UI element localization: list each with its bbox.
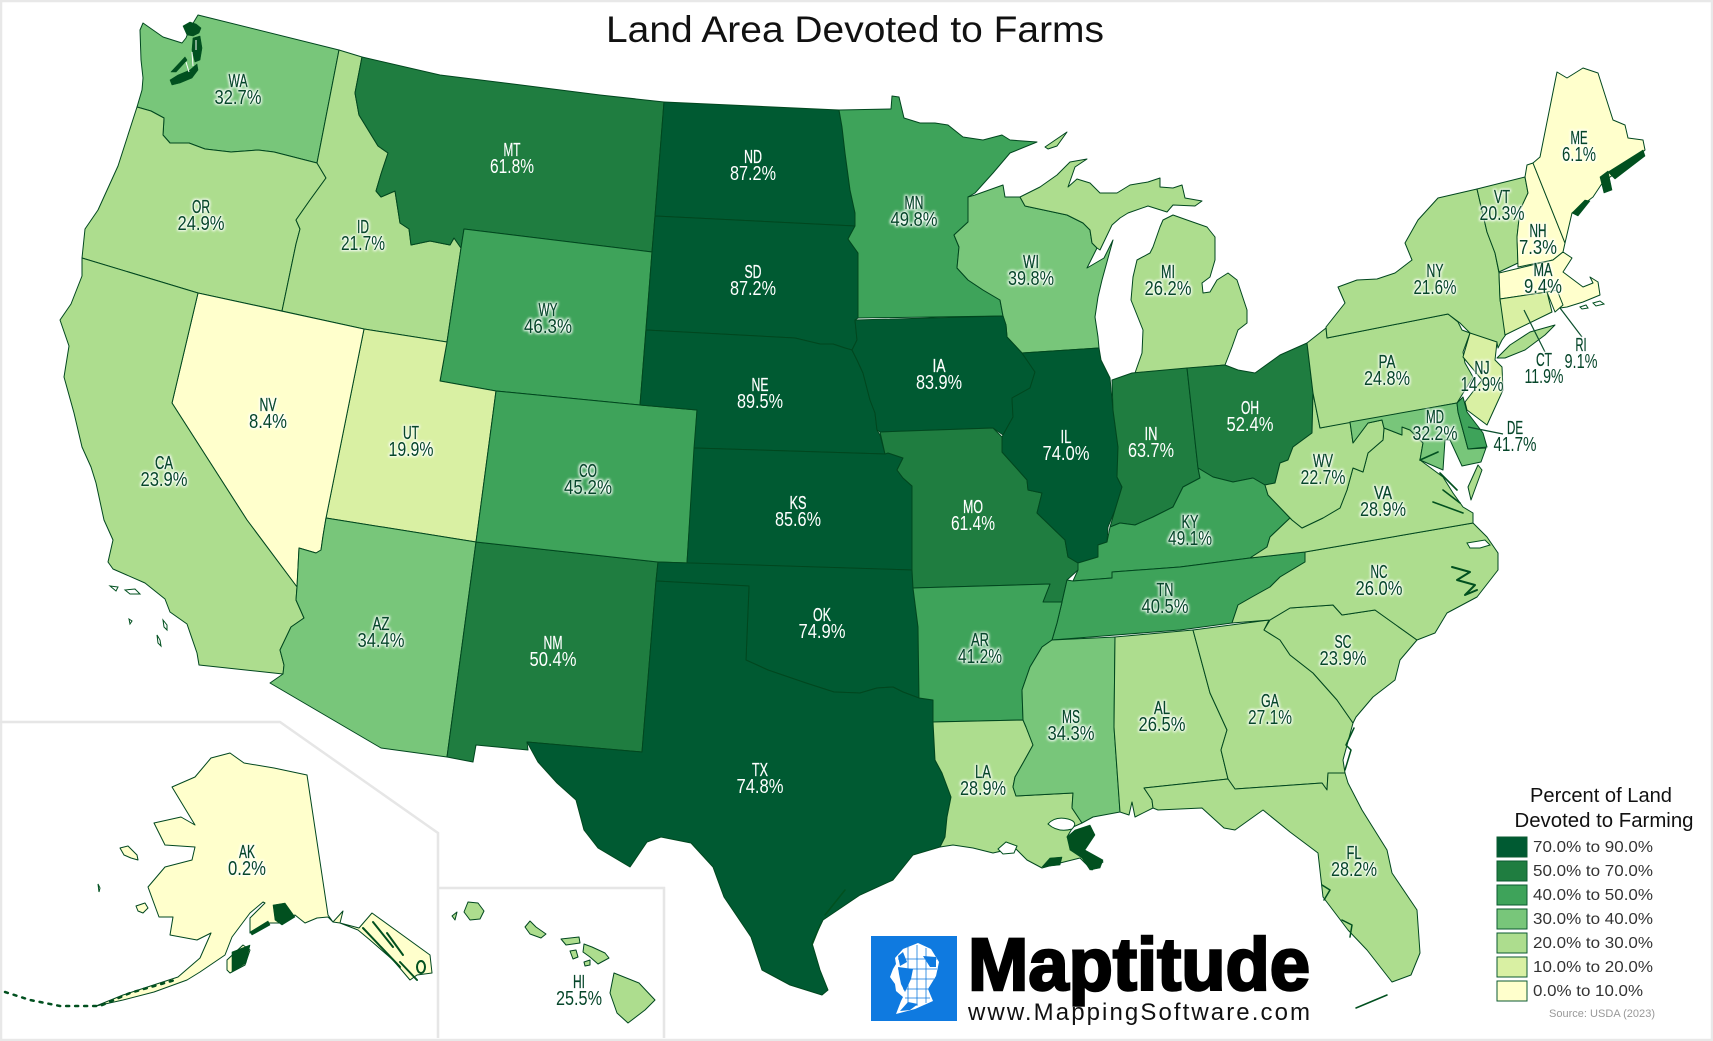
- state: New Jersey: [1463, 333, 1503, 425]
- state: Minnesota: [839, 96, 1037, 318]
- legend title: [1514, 785, 1694, 832]
- label: FL: FL: [1346, 843, 1362, 863]
- label: RI: RI: [1576, 335, 1586, 355]
- label: DE: 41.7%: [1494, 434, 1537, 456]
- label: WI: WI: [1023, 252, 1039, 272]
- state: South Carolina: [1264, 605, 1417, 723]
- label: TX: TX: [752, 760, 768, 780]
- state: Montana: [355, 57, 664, 252]
- label: MA: MA: [1534, 260, 1552, 280]
- label: SD: SD: [744, 262, 762, 282]
- label: IL: IL: [1060, 427, 1072, 447]
- legend row: 40 to 50: [1497, 885, 1653, 905]
- label: MA: 9.4%: [1524, 276, 1562, 298]
- label: IN: 63.7%: [1128, 440, 1174, 462]
- legend row: 30 to 40: [1497, 909, 1653, 929]
- label: AL: AL: [1154, 698, 1170, 718]
- legend row: 30 to 40: 30.0% to 40.0%: [1533, 911, 1653, 928]
- label: AL: 26.5%: [1138, 714, 1186, 736]
- leader line: RI: [1560, 308, 1582, 337]
- label: OH: 52.4%: [1226, 414, 1274, 436]
- label: IN: [1128, 424, 1174, 462]
- state: Delaware: [1457, 397, 1487, 449]
- logo url: www.MappingSoftware.com: [967, 999, 1310, 1026]
- label: TN: [1142, 580, 1189, 618]
- state: Pennsylvania: [1307, 314, 1473, 428]
- label: HI: [556, 972, 602, 1010]
- label: NY: NY: [1426, 261, 1444, 281]
- label: NH: NH: [1530, 221, 1546, 241]
- state: Illinois: [1002, 348, 1122, 563]
- label: AR: [958, 630, 1002, 668]
- state: Michigan lower peninsula: [1131, 215, 1247, 373]
- state: Kansas: [687, 448, 912, 570]
- label: OR: [178, 197, 225, 235]
- label: AK: [228, 842, 266, 880]
- legend row: 20 to 30: 20.0% to 30.0%: [1533, 935, 1653, 952]
- label: VT: [1480, 187, 1525, 225]
- state: Indiana: [1110, 368, 1200, 527]
- label: ID: 21.7%: [341, 233, 385, 255]
- label: IN: IN: [1144, 424, 1158, 444]
- state: Hawaii Kahoolawe: [584, 960, 590, 966]
- state: Arizona: [270, 518, 476, 757]
- label: ND: [730, 147, 776, 185]
- Maptitude logo: [871, 923, 1310, 1026]
- label: NJ: NJ: [1474, 358, 1490, 378]
- state: Idaho: [282, 50, 461, 342]
- state: Vermont: [1477, 177, 1528, 272]
- state: Utah: [326, 329, 496, 542]
- label: UT: UT: [403, 423, 419, 443]
- label: NM: [530, 633, 577, 671]
- label: WY: 46.3%: [524, 316, 572, 338]
- label: NY: 21.6%: [1414, 277, 1457, 299]
- label: CA: 23.9%: [140, 469, 188, 491]
- state: Long Island: [1497, 325, 1555, 358]
- label: TN: TN: [1156, 580, 1174, 600]
- legend: [1497, 785, 1694, 1020]
- state: Alaska: [96, 753, 432, 1006]
- label: MT: [490, 140, 534, 178]
- logo icon: head and globe: [871, 936, 957, 1021]
- label: OH: OH: [1241, 398, 1259, 418]
- label: WV: WV: [1313, 451, 1333, 471]
- title: Land Area Devoted to Farms: [606, 9, 1104, 50]
- label: NC: [1356, 562, 1403, 600]
- state: Michigan upper peninsula: [1020, 159, 1202, 250]
- legend row: 50 to 70: 50.0% to 70.0%: [1533, 863, 1653, 880]
- state: Massachusetts: [1499, 252, 1600, 308]
- state: Maine: [1533, 68, 1645, 243]
- label: VT: VT: [1494, 187, 1510, 207]
- state: Iowa: [852, 316, 1035, 435]
- label: AK: AK: [239, 842, 255, 862]
- state: Oklahoma: [656, 562, 919, 698]
- state: Alaska Kodiak island: [227, 945, 250, 973]
- state: Hawaii Molokai: [561, 937, 580, 945]
- label: WI: 39.8%: [1008, 268, 1054, 290]
- label: MN: MN: [904, 193, 924, 213]
- label: WA: [214, 71, 262, 109]
- state: Alaska St Lawrence island: [120, 846, 138, 860]
- legend row: 40 to 50: 40.0% to 50.0%: [1533, 887, 1653, 904]
- label: CA: [140, 453, 188, 491]
- state: Kentucky: [1073, 468, 1290, 581]
- state: California: [60, 258, 304, 674]
- label: VA: [1360, 483, 1406, 521]
- state: South Dakota: [646, 216, 858, 350]
- label: DE: DE: [1507, 418, 1523, 438]
- label: MS: [1048, 707, 1095, 745]
- label: NE: NE: [752, 375, 768, 395]
- state: Isle Royale: [1045, 132, 1067, 149]
- state: Tennessee: [1052, 552, 1305, 640]
- label: NE: [737, 375, 783, 413]
- state: North Dakota: [655, 102, 855, 226]
- label: NY: [1414, 261, 1457, 299]
- state: Hawaii Niihau: [452, 912, 457, 920]
- label: IL: 74.0%: [1042, 443, 1090, 465]
- label: CO: CO: [579, 461, 597, 481]
- state: Hawaii Maui: [583, 944, 609, 964]
- label: NH: [1519, 221, 1557, 259]
- label: FL: [1331, 843, 1377, 881]
- label: FL: 28.2%: [1331, 859, 1377, 881]
- label: CO: [564, 461, 612, 499]
- label: VT: 20.3%: [1480, 203, 1525, 225]
- label: NM: 50.4%: [530, 649, 577, 671]
- label: WI: [1008, 252, 1054, 290]
- label: MT: MT: [504, 140, 520, 160]
- label: AR: AR: [971, 630, 989, 650]
- label: IA: 83.9%: [916, 372, 962, 394]
- label: SC: [1320, 632, 1367, 670]
- label: PA: PA: [1378, 352, 1396, 372]
- label: KY: [1168, 512, 1212, 550]
- label: AZ: AZ: [372, 614, 390, 634]
- label: NH: 7.3%: [1519, 237, 1557, 259]
- label: WA: 32.7%: [214, 87, 262, 109]
- label: UT: [388, 423, 434, 461]
- label: VA: VA: [1374, 483, 1392, 503]
- label: IA: IA: [932, 356, 946, 376]
- label: IL: [1042, 427, 1090, 465]
- label: MD: MD: [1426, 407, 1444, 427]
- label: MA: [1524, 260, 1562, 298]
- label: KY: 49.1%: [1168, 528, 1212, 550]
- label: KS: KS: [790, 493, 806, 513]
- label: SD: 87.2%: [730, 278, 776, 300]
- label: MD: 32.2%: [1412, 423, 1458, 445]
- label: CA: CA: [155, 453, 173, 473]
- label: ND: ND: [744, 147, 762, 167]
- label: KS: [775, 493, 821, 531]
- state: North Carolina: [1232, 523, 1498, 640]
- label: DE: [1494, 418, 1537, 456]
- state: Hawaii Lanai: [570, 950, 578, 959]
- state: New Hampshire: [1517, 163, 1565, 267]
- label: HI: 25.5%: [556, 988, 602, 1010]
- label: MO: [951, 497, 995, 535]
- state: Maryland: [1350, 403, 1486, 470]
- label: ID: ID: [357, 217, 369, 237]
- legend row: 70 to 90: [1497, 837, 1653, 857]
- state: Virginia: [1250, 427, 1473, 558]
- state: Missouri: [880, 428, 1078, 602]
- label: AK: 0.2%: [228, 858, 266, 880]
- state: Georgia: [1193, 620, 1353, 790]
- label: GA: [1248, 691, 1292, 729]
- label: PA: [1364, 352, 1410, 390]
- logo wordmark: Maptitude: [968, 923, 1310, 1006]
- label: NV: [249, 395, 287, 433]
- legend row: 10 to 20: [1497, 957, 1653, 977]
- label: WA: WA: [228, 71, 248, 91]
- label: MN: 49.8%: [890, 209, 938, 231]
- label: KY: KY: [1182, 512, 1198, 532]
- label: NV: NV: [260, 395, 276, 415]
- label: PA: 24.8%: [1364, 368, 1410, 390]
- label: CO: 45.2%: [564, 477, 612, 499]
- label: NJ: 14.9%: [1460, 374, 1504, 396]
- label: MN: [890, 193, 938, 231]
- state: Alabama: [1114, 630, 1228, 817]
- label: OK: [798, 605, 846, 643]
- legend row: 50 to 70: [1497, 861, 1653, 881]
- state: West Virginia: [1265, 393, 1384, 528]
- label: ND: 87.2%: [730, 163, 776, 185]
- label: TX: [736, 760, 784, 798]
- state: Virginia eastern shore: [1468, 465, 1482, 500]
- label: ID: [341, 217, 385, 255]
- label: SC: SC: [1334, 632, 1352, 652]
- leader line: DE: [1468, 427, 1503, 434]
- state: Washington: [137, 15, 339, 163]
- label: NC: 26.0%: [1356, 578, 1403, 600]
- label: AZ: 34.4%: [358, 630, 405, 652]
- legend row: 0 to 10: 0.0% to 10.0%: [1533, 983, 1643, 1000]
- state: Alaska Nunivak island: [136, 903, 148, 913]
- label: OK: OK: [813, 605, 831, 625]
- state: Nevada: [172, 293, 364, 587]
- state: Louisiana: [933, 720, 1103, 870]
- state: New Mexico: [447, 542, 658, 762]
- label: HI: HI: [573, 972, 585, 992]
- label: NE: 89.5%: [737, 391, 783, 413]
- legend row: 10 to 20: 10.0% to 20.0%: [1533, 959, 1653, 976]
- label: MD: [1412, 407, 1458, 445]
- label: KS: 85.6%: [775, 509, 821, 531]
- leader line: CT: [1524, 310, 1545, 352]
- label: OR: OR: [192, 197, 210, 217]
- state: Wisconsin: [954, 185, 1113, 353]
- label: ME: 6.1%: [1562, 144, 1596, 166]
- label: TX: 74.8%: [736, 776, 784, 798]
- state: Florida: [1144, 773, 1420, 982]
- label: LA: LA: [975, 762, 991, 782]
- label: OH: [1226, 398, 1274, 436]
- label: AR: 41.2%: [958, 646, 1002, 668]
- label: CT: 11.9%: [1524, 366, 1564, 388]
- label: MI: 26.2%: [1144, 278, 1192, 300]
- label: WV: 22.7%: [1300, 467, 1346, 489]
- state: Colorado: [476, 391, 697, 563]
- label: WY: [524, 300, 572, 338]
- label: WY: WY: [538, 300, 558, 320]
- state: Oregon: [82, 107, 326, 311]
- label: NM: NM: [544, 633, 562, 653]
- state: Arkansas: [913, 584, 1062, 722]
- state: Hawaii Oahu: [525, 921, 546, 938]
- state: Hawaii Kauai: [464, 902, 484, 920]
- label: SD: [730, 262, 776, 300]
- label: CT: CT: [1536, 350, 1552, 370]
- state: New York: [1326, 189, 1507, 348]
- label: MI: MI: [1161, 262, 1175, 282]
- state: Rhode Island: [1547, 290, 1563, 312]
- state: Mississippi: [1013, 637, 1120, 823]
- legend row: 20 to 30: [1497, 933, 1653, 953]
- label: GA: GA: [1261, 691, 1279, 711]
- label: CT: [1524, 350, 1564, 388]
- label: MO: MO: [963, 497, 983, 517]
- label: VA: 28.9%: [1360, 499, 1406, 521]
- label: NJ: [1460, 358, 1504, 396]
- state: Hawaii big island: [610, 973, 655, 1023]
- label: MI: [1144, 262, 1192, 300]
- label: ME: ME: [1570, 128, 1588, 148]
- label: NV: 8.4%: [249, 411, 287, 433]
- state: Connecticut: [1500, 292, 1552, 335]
- label: GA: 27.1%: [1248, 707, 1292, 729]
- label: MO: 61.4%: [951, 513, 995, 535]
- state: Nebraska: [640, 330, 885, 454]
- label: ME: [1562, 128, 1596, 166]
- source note: Source: USDA (2023): [1549, 1008, 1655, 1020]
- label: MT: 61.8%: [490, 156, 534, 178]
- label: OK: 74.9%: [798, 621, 846, 643]
- state: Wyoming: [440, 229, 652, 405]
- label: AL: [1138, 698, 1186, 736]
- legend title: Devoted to Farming: [1514, 810, 1694, 832]
- legend row: 70 to 90: 70.0% to 90.0%: [1533, 839, 1653, 856]
- label: UT: 19.9%: [388, 439, 434, 461]
- state: Ohio: [1187, 343, 1313, 485]
- state value labels: [140, 71, 1598, 1010]
- label: WV: [1300, 451, 1346, 489]
- label: MS: 34.3%: [1048, 723, 1095, 745]
- label: AZ: [358, 614, 405, 652]
- label: IA: [916, 356, 962, 394]
- label: OR: 24.9%: [178, 213, 225, 235]
- state: Texas: [527, 581, 951, 995]
- legend row: 0 to 10: [1497, 981, 1643, 1001]
- label: SC: 23.9%: [1320, 648, 1367, 670]
- label: RI: 9.1%: [1564, 351, 1598, 373]
- label: RI: [1564, 335, 1598, 373]
- label: TN: 40.5%: [1142, 596, 1189, 618]
- label: LA: 28.9%: [960, 778, 1006, 800]
- label: LA: [960, 762, 1006, 800]
- label: NC: NC: [1370, 562, 1388, 582]
- label: MS: MS: [1062, 707, 1080, 727]
- legend title: Percent of Land: [1530, 785, 1672, 807]
